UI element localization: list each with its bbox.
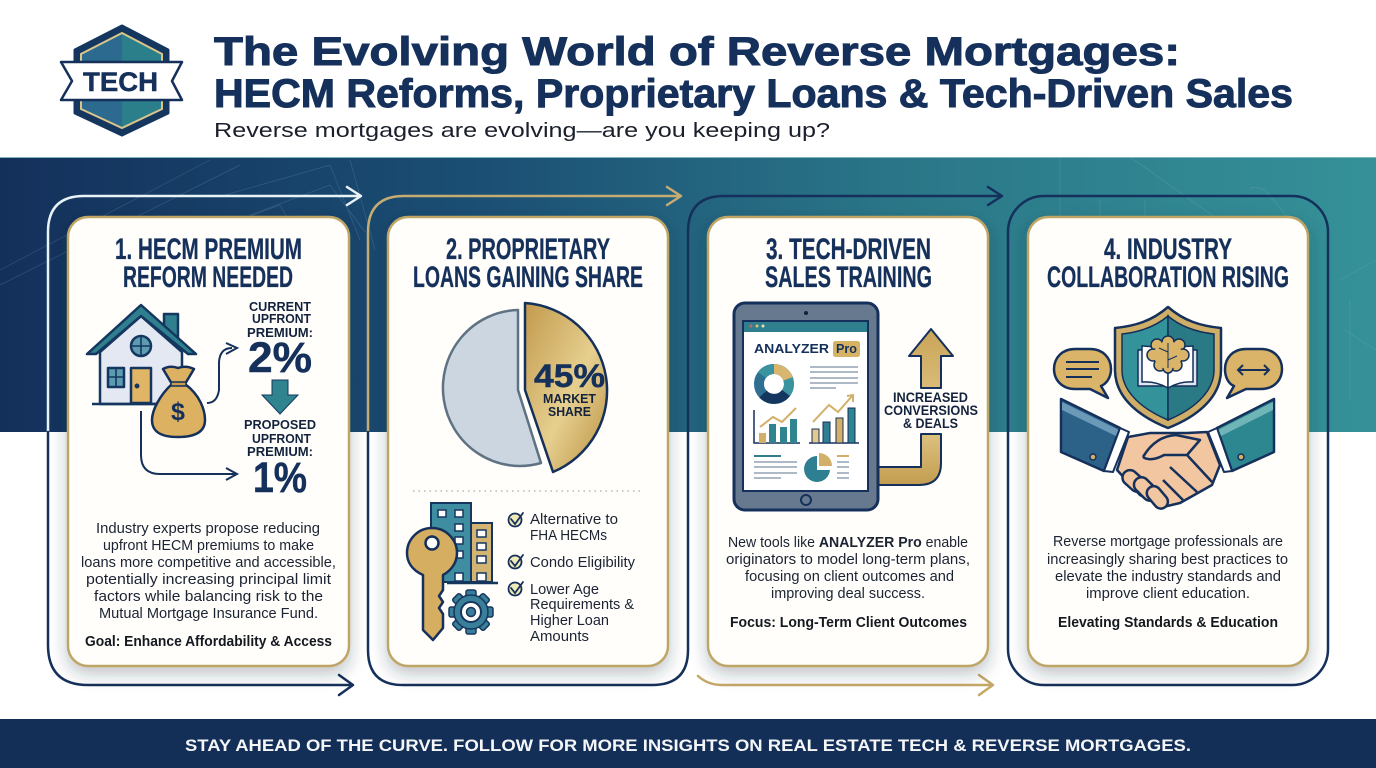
current premium label: 2% [248,334,312,382]
icon: money bag [152,367,205,437]
icon: buildings [431,503,498,583]
checklist [508,512,636,645]
goal line: Goal: Enhance Affordability & Access [85,634,332,650]
check 1 [508,513,523,526]
heading 1: REFORM NEEDED [123,261,293,294]
checklist text: Requirements & [530,597,634,613]
heading 4: 4. INDUSTRY [1104,233,1232,266]
hands [1117,432,1220,511]
heading 3: SALES TRAINING [765,261,932,294]
current premium label [247,299,313,382]
icon: book [1138,346,1197,388]
panel: card 2 [388,217,668,666]
body text 1: factors while balancing risk to the [94,589,323,605]
arrow label: INCREASED [893,390,968,405]
background band [0,157,1376,432]
icon: key [407,528,457,640]
heading 2: 2. PROPRIETARY [446,233,610,266]
body text 1: upfront HECM premiums to make [103,538,314,554]
heading 1 [115,233,302,294]
body text 3: focusing on client outcomes and [745,569,954,585]
bar chart 1 [754,408,800,443]
left cuff [1104,428,1129,472]
title [214,30,1293,116]
heading 4 [1047,233,1289,294]
arrow: increased conversions [878,329,953,485]
title: The Evolving World of Reverse Mortgages: [214,30,1180,74]
body text 3: New tools like ANALYZER Pro enable [728,535,968,551]
arrow: rail 2 bottom joining rail 3 [368,187,1002,685]
arrow: rail 2 top [368,187,681,432]
pie chart [443,303,607,472]
checklist text: FHA HECMs [530,528,607,544]
bar chart 2 [809,395,859,443]
current premium label: PREMIUM: [247,325,313,340]
icon: tablet [734,303,878,510]
heading 2: LOANS GAINING SHARE [413,261,643,294]
body text 4: Reverse mortgage professionals are [1053,534,1283,550]
pie chart: 45% [534,358,605,394]
icon: house [87,305,196,404]
body text 3: originators to model long-term plans, [726,552,970,568]
heading 3 [765,233,932,294]
checklist text [530,512,636,645]
body text 1 [81,521,336,622]
pie chart: SHARE [548,404,591,419]
standards line: Elevating Standards & Education [1058,615,1278,631]
heading 1: 1. HECM PREMIUM [115,233,302,266]
body text 4 [1047,534,1288,602]
arrow: rail 1 bottom [48,432,353,695]
right sleeve [1217,399,1274,471]
checklist text: Alternative to [530,512,618,528]
body text 1: Industry experts propose reducing [96,521,320,537]
report lines [810,367,858,388]
footer banner [0,719,1376,768]
logo: TECH badge: TECH [83,67,158,97]
icon: speech bubble left [1054,349,1111,398]
panel: card 4 [1028,217,1308,666]
arrow: to proposed premium [141,411,237,480]
donut chart [759,369,789,399]
focus line: Focus: Long-Term Client Outcomes [730,615,967,631]
body text 1: potentially increasing principal limit [86,572,331,588]
small pie [804,453,832,482]
current premium label: UPFRONT [252,311,311,326]
checklist text: Higher Loan [530,613,609,629]
left sleeve [1061,399,1120,471]
arrow: down [262,380,298,414]
arrow label [884,390,978,431]
icon: handshake [1061,399,1274,511]
icon: shield [1115,307,1221,428]
body text 3 [726,535,970,602]
flow arrows [48,187,1328,695]
arrow label: & DEALS [903,416,958,431]
current premium label: CURRENT [249,299,311,314]
title: HECM Reforms, Proprietary Loans & Tech-Driven Sales [214,72,1293,116]
icon: money bag: $ [171,398,185,426]
icon: tablet: Pro [836,341,857,356]
checklist text: Lower Age [530,582,599,598]
proposed premium label [244,417,316,502]
proposed premium label: PREMIUM: [247,444,313,459]
arrow: rail 1 top [48,187,361,432]
pie chart: MARKET [543,391,596,406]
logo: TECH badge [61,26,182,135]
body text 1: loans more competitive and accessible, [81,555,336,571]
proposed premium label: UPFRONT [252,431,311,446]
body text 4: improve client education. [1086,586,1250,602]
check 2 [508,555,523,568]
subtitle: Reverse mortgages are evolving—are you keeping up? [214,119,830,142]
report footer lines [754,455,781,457]
icon: gear [449,590,493,634]
proposed premium label: PROPOSED [244,417,316,432]
panel: card 3 [708,217,988,666]
checklist text: Condo Eligibility [530,555,636,571]
checklist text: Amounts [530,629,589,645]
arrow: rail 4 [1008,196,1328,685]
arrow label: CONVERSIONS [884,403,978,418]
right cuff [1208,428,1232,472]
heading 2 [413,233,643,294]
body text 4: increasingly sharing best practices to [1047,552,1288,568]
panel: card 1 [68,217,349,666]
arrow: to current premium [207,343,237,403]
icon: tablet: ANALYZER [754,341,830,356]
check 3 [508,582,523,596]
body text 4: elevate the industry standards and [1055,569,1281,585]
body text 3: improving deal success. [771,586,925,602]
arrow: gold lower rail [698,675,993,695]
icon: speech bubble right [1225,349,1282,398]
proposed premium label: 1% [253,454,307,502]
footer banner: STAY AHEAD OF THE CURVE. FOLLOW FOR MORE INSIGHTS ON REAL ESTATE TECH & REVERSE MORTGAGES. [185,737,1191,755]
heading 3: 3. TECH-DRIVEN [766,233,931,266]
icon: brain [1147,336,1189,373]
body text 1: Mutual Mortgage Insurance Fund. [99,606,318,622]
